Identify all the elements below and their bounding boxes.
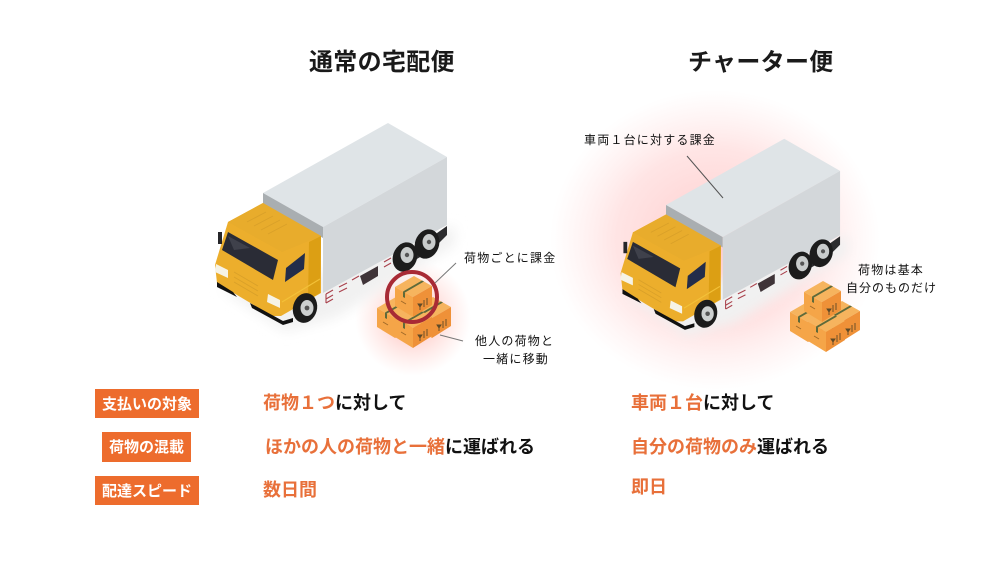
illustration: left parcel stack [377, 276, 451, 348]
text: charter payment target: 車両１台に対して [631, 392, 774, 413]
label: payment target: 支払いの対象 [102, 395, 192, 413]
text: standard payment target: 荷物１つに対して [263, 393, 406, 413]
glow: behind parcels [355, 260, 471, 376]
annotation: own parcels only: 自分のものだけ [846, 281, 937, 295]
label: delivery speed: 配達スピード [102, 483, 192, 500]
highlight circle: single parcel [387, 272, 437, 322]
annotation: travels with others' parcels: 他人の荷物と [475, 334, 554, 348]
text: charter mixed loading: 自分の荷物のみ運ばれる [631, 437, 829, 457]
text: standard mixed loading: ほかの人の荷物と一緒に運ばれる [265, 437, 535, 457]
annotation: travels with others' parcels: 一緒に移動 [483, 352, 549, 366]
annotation: charge per vehicle: 車両１台に対する課金 [584, 132, 716, 147]
label: mixed loading: 荷物の混載 [109, 438, 184, 456]
annotation: travels with others' parcels [475, 334, 554, 366]
leader line: per parcel [435, 263, 456, 283]
illustration: right parcel stack [790, 281, 860, 352]
annotation: own parcels only: 荷物は基本 [858, 263, 924, 277]
heading: charter delivery: チャーター便 [688, 49, 834, 76]
label: payment target [95, 389, 199, 418]
heading: standard delivery: 通常の宅配便 [309, 49, 455, 76]
illustration: standard delivery truck [215, 123, 455, 332]
label: delivery speed [95, 476, 199, 505]
text: standard speed: 数日間 [263, 480, 317, 500]
leader line: per vehicle [687, 156, 723, 198]
annotation: charge per parcel: 荷物ごとに課金 [464, 250, 556, 265]
annotation: own parcels only [846, 263, 937, 295]
label: mixed loading [102, 432, 191, 462]
leader line: mixed parcels [440, 335, 463, 341]
glow: behind charter truck [550, 90, 880, 390]
text: charter speed: 即日 [631, 477, 667, 497]
illustration: charter truck [621, 139, 848, 336]
